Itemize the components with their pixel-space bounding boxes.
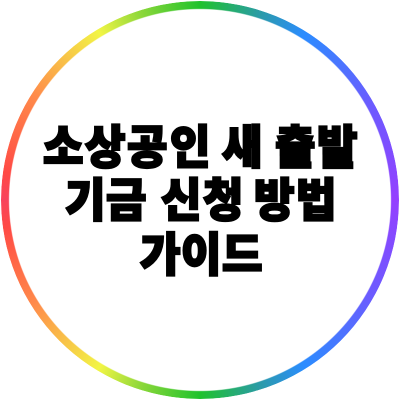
title line 1: 소상공인 새 출발: [43, 122, 357, 174]
title line 2: 기금 신청 방법: [65, 175, 336, 227]
title line 3: 가이드: [140, 229, 262, 281]
